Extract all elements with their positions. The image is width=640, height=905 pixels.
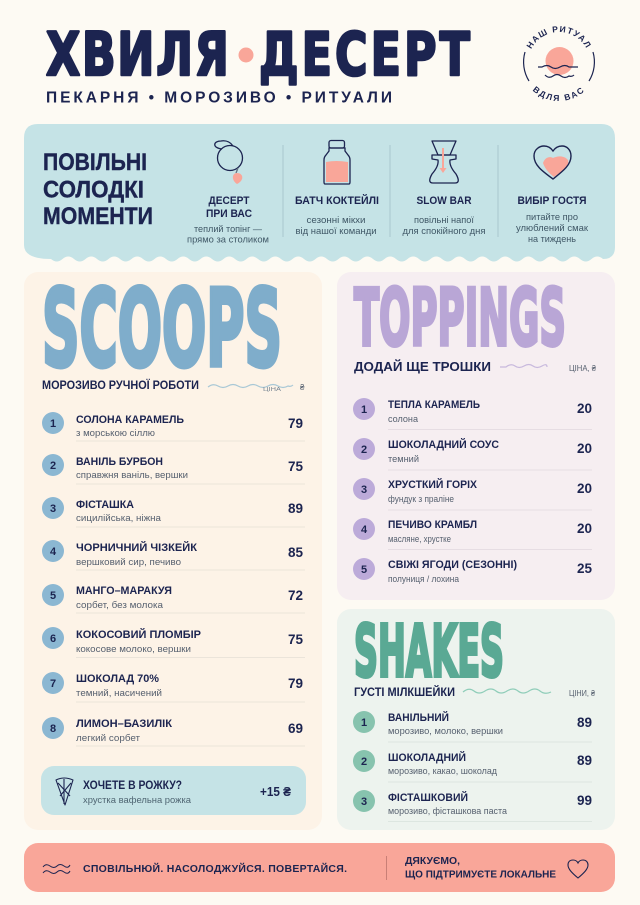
subheading: scoops: ЦІНА	[263, 387, 282, 393]
feature: dessert at your table: теплий топінг —	[194, 224, 262, 235]
footer banner: ЩО ПІДТРИМУЄТЕ ЛОКАЛЬНЕ	[405, 868, 556, 880]
subheading: toppings: ДОДАЙ ЩЕ ТРОШКИ	[354, 359, 491, 374]
row: pistachio shake: ФІСТАШКОВИЙ	[388, 791, 468, 804]
row: vanilla shake: 1	[361, 717, 367, 729]
row: bourbon vanilla: справжня ваніль, вершки	[76, 470, 188, 480]
row: pistachio: сицилійська, ніжна	[76, 513, 161, 523]
row: salted caramel	[42, 412, 305, 441]
icon: chemex	[430, 141, 458, 183]
row: mango passionfruit: 5	[50, 590, 56, 602]
row: pistachio: ФІСТАШКА	[76, 499, 134, 511]
row: lemon basil: ЛИМОН–БАЗИЛІК	[76, 718, 172, 730]
badge: наш ритуал вдля вас	[523, 26, 595, 101]
row: crunchy nut: 3	[361, 484, 367, 496]
row: pistachio shake	[353, 790, 592, 822]
subheading: toppings	[354, 359, 596, 374]
row: vanilla shake: морозиво, молоко, вершки	[388, 726, 503, 736]
panel heading: СОЛОДКІ	[43, 176, 144, 204]
title	[46, 20, 470, 90]
row: chocolate 70: 79	[288, 676, 303, 691]
row: fresh berries: 25	[577, 561, 592, 576]
icon: waves	[43, 864, 70, 874]
title: ДЕСЕРТ	[259, 20, 470, 90]
subheading: scoops: МОРОЗИВО РУЧНОЇ РОБОТИ	[42, 379, 199, 392]
footer banner	[24, 843, 615, 892]
row: crunchy nut: 20	[577, 481, 592, 496]
row: pistachio	[42, 497, 305, 527]
row: lemon basil: 69	[288, 721, 303, 736]
row: salted caramel: з морською сіллю	[76, 428, 155, 438]
panel: scoops: SCOOPS	[42, 268, 282, 390]
row: fresh berries: полуниця / лохина	[388, 574, 459, 584]
row: mango passionfruit	[42, 584, 305, 613]
row: bourbon vanilla: 2	[50, 460, 56, 472]
row: fresh berries	[353, 558, 592, 584]
row: mango passionfruit: МАНГО–МАРАКУЯ	[76, 585, 172, 597]
row: pistachio: 89	[288, 501, 303, 516]
title: ХВИЛЯ	[46, 20, 229, 90]
feature: batch cocktails: від нашої команди	[296, 226, 376, 237]
icon: heart outline	[568, 860, 588, 878]
row: cookie crumble: 4	[361, 524, 368, 536]
row: coconut plombir: КОКОСОВИЙ ПЛОМБІР	[76, 628, 201, 641]
row: bourbon vanilla: ВАНІЛЬ БУРБОН	[76, 456, 163, 468]
row: vanilla shake: 89	[577, 715, 592, 730]
badge: наш ритуал вдля вас: НАШ РИТУАЛ	[526, 26, 591, 49]
row: salted caramel: 1	[50, 418, 56, 430]
feature: guest's choice: на тиждень	[528, 234, 576, 245]
row: salted caramel: 79	[288, 416, 303, 431]
subheading: shakes: ГУСТІ МІЛКШЕЙКИ	[354, 686, 455, 699]
panel heading: ПОВІЛЬНІ	[43, 149, 147, 176]
panel: slow sweet moments	[24, 124, 615, 262]
row: chocolate shake: ШОКОЛАДНИЙ	[388, 751, 466, 764]
row: pistachio: 3	[50, 503, 56, 515]
row: lemon basil	[42, 717, 305, 746]
row: chocolate sauce: ШОКОЛАДНИЙ СОУС	[388, 438, 499, 451]
row: chocolate shake: 89	[577, 753, 592, 768]
feature: guest's choice	[516, 195, 589, 245]
row: chocolate 70	[42, 672, 305, 702]
row: blueberry cheesecake	[42, 540, 305, 570]
panel heading	[43, 149, 153, 230]
subheading: shakes	[354, 686, 595, 699]
subtitle: ПЕКАРНЯ • МОРОЗИВО • РИТУАЛИ	[46, 90, 392, 106]
row: cookie crumble: масляне, хрустке	[388, 534, 451, 544]
row: warm caramel: 1	[361, 404, 367, 416]
footer banner: СПОВІЛЬНЮЙ. НАСОЛОДЖУЙСЯ. ПОВЕРТАЙСЯ.	[83, 862, 347, 875]
row: blueberry cheesecake: вершковий сир, печиво	[76, 557, 181, 567]
feature: slow bar	[402, 195, 486, 237]
row: chocolate shake: морозиво, какао, шоколад	[388, 766, 498, 776]
row: coconut plombir	[42, 627, 305, 658]
row: cookie crumble: ПЕЧИВО КРАМБЛ	[388, 519, 477, 531]
feature: guest's choice: улюблений смак	[516, 223, 589, 234]
row: warm caramel: 20	[577, 401, 592, 416]
subheading: scoops: ₴	[300, 383, 305, 392]
row: crunchy nut: ХРУСТКИЙ ГОРІХ	[388, 478, 478, 491]
row: chocolate sauce: 2	[361, 444, 367, 456]
row: mango passionfruit: 72	[288, 588, 303, 603]
callout: waffle cone: ХОЧЕТЕ В РОЖКУ?	[83, 780, 182, 792]
row: pistachio shake: морозиво, фісташкова паста	[388, 806, 507, 816]
row: chocolate 70: 7	[50, 678, 56, 690]
row: coconut plombir: кокосове молоко, вершки	[76, 644, 191, 654]
row: coconut plombir: 75	[288, 632, 303, 647]
row: mango passionfruit: сорбет, без молока	[76, 600, 163, 610]
callout: waffle cone	[41, 766, 306, 815]
subheading: shakes: ЦІНИ, ₴	[569, 688, 595, 698]
feature: dessert at your table: ДЕСЕРТ	[208, 195, 250, 207]
row: crunchy nut	[353, 478, 592, 510]
row: bourbon vanilla: 75	[288, 459, 303, 474]
badge: наш ритуал вдля вас: ВДЛЯ ВАС	[532, 86, 584, 101]
row: cookie crumble	[353, 518, 592, 550]
row: salted caramel: СОЛОНА КАРАМЕЛЬ	[76, 414, 184, 426]
feature: batch cocktails: сезонні мікхи	[306, 215, 366, 226]
row: chocolate sauce	[353, 438, 592, 470]
panel: scoops	[24, 268, 322, 830]
feature: batch cocktails	[295, 194, 379, 237]
row: cookie crumble: 20	[577, 521, 592, 536]
feature: dessert at your table: прямо за столиком	[187, 234, 269, 246]
row: bourbon vanilla	[42, 454, 305, 484]
row: coconut plombir: 6	[50, 633, 56, 645]
row: chocolate shake	[353, 750, 592, 782]
feature: slow bar: для спокійного дня	[402, 226, 486, 237]
row: crunchy nut: фундук з праліне	[388, 494, 454, 504]
row: chocolate sauce: темний	[388, 454, 419, 464]
callout: waffle cone: хрустка вафельна рожка	[83, 795, 192, 806]
icon: cone	[56, 778, 73, 805]
icon: heart	[534, 146, 571, 179]
panel heading: МОМЕНТИ	[43, 203, 153, 230]
row: warm caramel	[353, 398, 592, 430]
feature: guest's choice: ВИБІР ГОСТЯ	[518, 195, 587, 207]
row: chocolate shake: 2	[361, 756, 367, 768]
row: chocolate sauce: 20	[577, 441, 592, 456]
feature: batch cocktails: БАТЧ КОКТЕЙЛІ	[295, 194, 379, 207]
row: vanilla shake	[353, 711, 592, 742]
subheading: scoops	[42, 379, 305, 393]
feature: dessert at your table: ПРИ ВАС	[206, 208, 252, 220]
row: fresh berries: 5	[361, 564, 367, 576]
row: fresh berries: СВІЖІ ЯГОДИ (СЕЗОННІ)	[388, 559, 517, 571]
row: lemon basil: 8	[50, 723, 56, 735]
row: blueberry cheesecake: 85	[288, 545, 303, 560]
row: pistachio shake: 3	[361, 796, 367, 808]
row: vanilla shake: ВАНІЛЬНИЙ	[388, 711, 449, 724]
row: blueberry cheesecake: ЧОРНИЧНИЙ ЧІЗКЕЙК	[76, 541, 197, 554]
row: chocolate 70: ШОКОЛАД 70%	[76, 673, 159, 685]
panel: toppings	[337, 272, 615, 600]
footer banner: ДЯКУЄМО,	[405, 855, 460, 867]
callout: waffle cone: +15 ₴	[260, 784, 291, 799]
feature: dessert at your table	[187, 195, 269, 246]
row: blueberry cheesecake: 4	[50, 546, 57, 558]
row: warm caramel: солона	[388, 414, 418, 424]
subheading: toppings: ЦІНА, ₴	[569, 363, 596, 373]
feature: slow bar: повільні напої	[414, 215, 474, 226]
row: chocolate 70: темний, насичений	[76, 688, 162, 698]
row: warm caramel: ТЕПЛА КАРАМЕЛЬ	[388, 399, 480, 411]
feature: guest's choice: питайте про	[526, 212, 578, 223]
icon: dessert with heart tag	[215, 141, 242, 184]
row: lemon basil: легкий сорбет	[76, 733, 140, 743]
row: pistachio shake: 99	[577, 793, 592, 808]
icon: bottle	[324, 140, 350, 184]
panel: shakes	[337, 609, 615, 830]
feature: slow bar: SLOW BAR	[416, 195, 472, 207]
